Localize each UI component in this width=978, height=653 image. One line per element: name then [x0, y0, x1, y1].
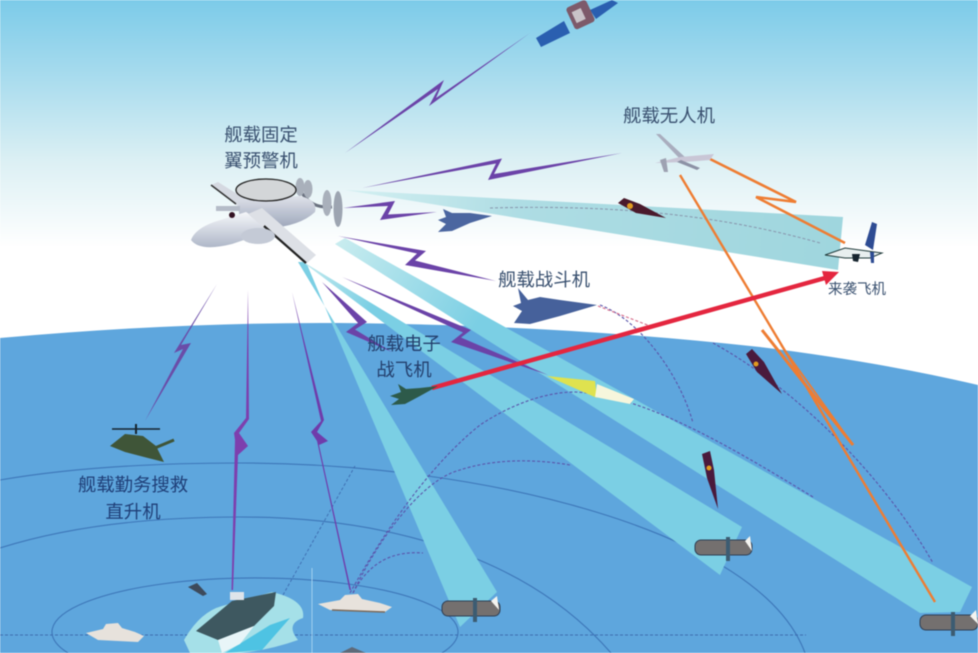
label: helicopter: 舰载勤务搜救: [78, 474, 188, 495]
label: EW aircraft line 2: 战飞机: [376, 359, 432, 380]
defensive missile: [547, 376, 634, 404]
radar beam: submarine 3: [335, 238, 972, 613]
carrier fighter: top: [438, 209, 492, 232]
submarine 3: [920, 610, 978, 636]
label: incoming aircraft: 来袭飞机: [828, 281, 886, 298]
label: fighter: 舰载战斗机: [498, 269, 590, 290]
data links: purple lightning bolts: [145, 33, 622, 590]
radar beam: submarine 2: [300, 260, 742, 575]
incoming missile 3: [702, 451, 718, 509]
UAV: [655, 134, 714, 172]
shipborne fighter icon: [513, 288, 597, 324]
electronic warfare aircraft: [390, 384, 438, 405]
threat links: orange: [680, 158, 935, 602]
label: AWACS line 2: 翼预警机: [224, 150, 298, 171]
AWACS aircraft: [191, 178, 342, 264]
small boat: [188, 583, 207, 596]
label: helicopter line 2: 直升机: [105, 501, 161, 522]
radar beam: submarine 1: [298, 262, 497, 627]
incoming aircraft: [825, 222, 882, 263]
submarine 1: [442, 596, 500, 622]
range rings: [0, 463, 805, 653]
incoming missile 1: [618, 198, 666, 218]
radar beam: incoming aircraft: [345, 190, 843, 270]
helicopter: [110, 424, 174, 462]
trajectories: dashed missile arcs: [350, 207, 933, 593]
label: AWACS: 舰载固定: [224, 124, 298, 145]
escort ship left: [86, 623, 144, 642]
bottom ship fragment: [340, 647, 366, 653]
sky background: [0, 0, 978, 260]
escort ship right: [318, 594, 392, 612]
satellite: [536, 0, 618, 47]
aircraft carrier: [184, 592, 303, 653]
sea surface: [0, 323, 978, 653]
label: EW aircraft: 舰载电子: [367, 333, 441, 354]
label: UAV: 舰载无人机: [623, 105, 715, 126]
submarine 2: [695, 536, 752, 561]
red arrow: fighter to incoming aircraft: [432, 271, 839, 388]
incoming missile 2: [746, 349, 782, 394]
reference lines: [0, 466, 806, 653]
